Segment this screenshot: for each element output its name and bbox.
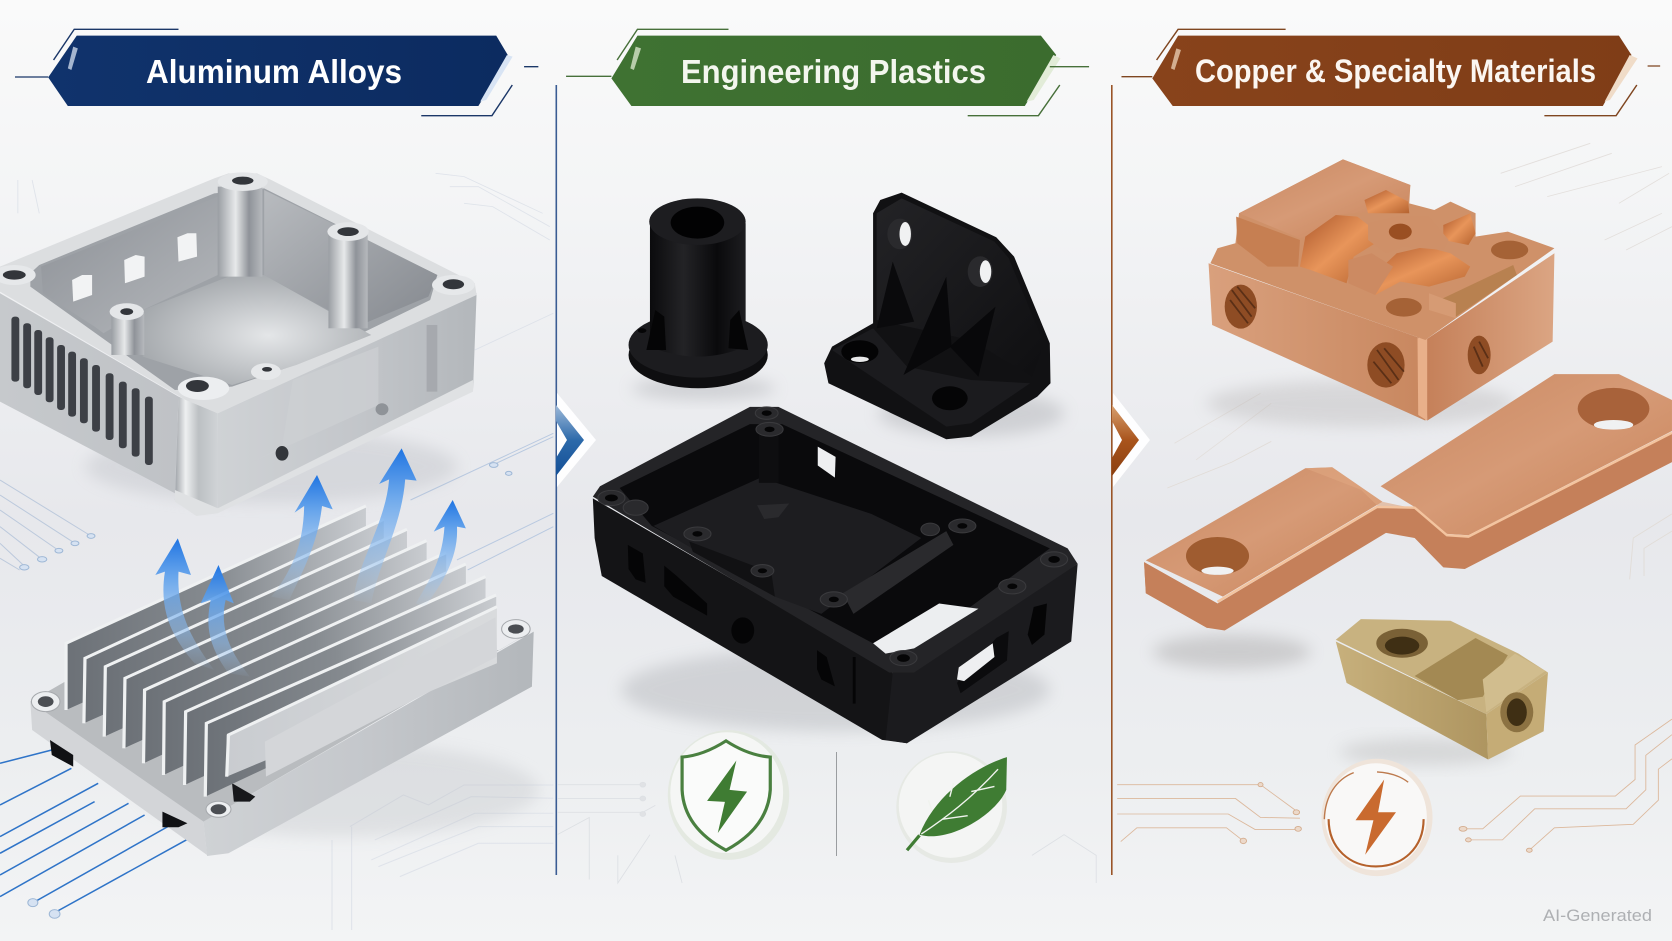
panel: engineering plastics <box>557 29 1096 883</box>
arrows: heat flow <box>155 448 466 677</box>
icon: circled lightning bolt <box>1321 759 1433 876</box>
panel: copper and specialty materials <box>1117 29 1672 925</box>
circuit traces: copper panel <box>1117 143 1672 852</box>
part: aluminum heat sink <box>30 506 539 856</box>
part: black flanged bushing <box>629 198 775 400</box>
panel: aluminum alloys <box>0 29 553 930</box>
divider: copper with chevron <box>1111 85 1150 875</box>
divider: blue with chevron <box>556 85 596 875</box>
heading: Copper & Specialty Materials <box>1195 53 1596 89</box>
heading: Engineering Plastics <box>681 53 986 90</box>
fins <box>66 506 497 797</box>
part: black angle bracket <box>824 193 1064 439</box>
top silhouette <box>1210 159 1554 340</box>
watermark: AI-Generated <box>1543 906 1652 925</box>
part: copper bus bar <box>1144 374 1672 669</box>
banner: copper and specialty materials <box>1121 29 1660 116</box>
part: brass fitting <box>1336 619 1548 766</box>
circuit traces: aluminum panel <box>0 173 553 930</box>
banner: engineering plastics <box>566 29 1089 116</box>
separator between icons <box>836 752 837 856</box>
icon: shield with lightning bolt <box>668 730 789 860</box>
part: aluminum enclosure <box>0 172 477 516</box>
banner: aluminum alloys <box>15 29 538 116</box>
icon: leaf <box>896 751 1007 863</box>
part: black enclosure tray <box>593 407 1078 743</box>
circuit traces: plastics panel <box>557 782 1096 883</box>
vent slots <box>11 317 153 465</box>
heading: Aluminum Alloys <box>146 53 402 90</box>
part: copper machined block <box>1207 159 1554 427</box>
pillars <box>218 187 262 277</box>
